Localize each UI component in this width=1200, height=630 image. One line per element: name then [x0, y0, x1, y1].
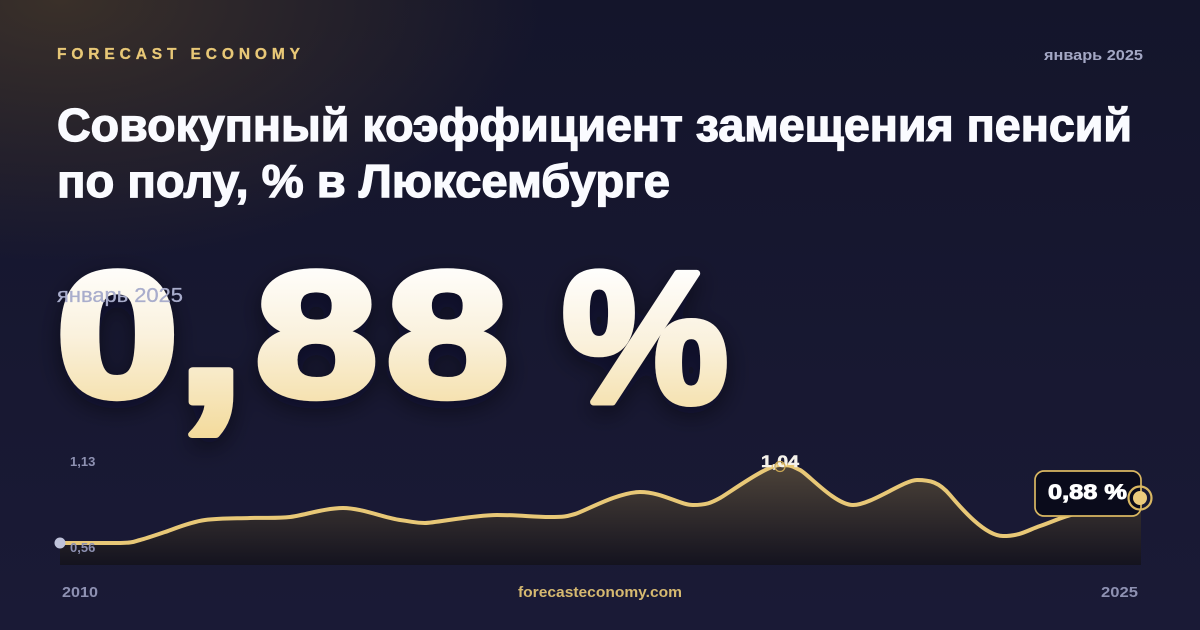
- date top right: январь 2025: [1044, 47, 1143, 64]
- line chart: [54, 452, 1152, 565]
- start point: [54, 538, 66, 548]
- big number: 0: [56, 235, 179, 434]
- website footer: forecasteconomy.com: [518, 585, 682, 601]
- x axis end year: 2025: [1101, 584, 1138, 601]
- axis max label: 1,13: [70, 454, 95, 469]
- title: по полу, % в Люксембурге: [57, 155, 670, 207]
- chart line: [60, 465, 1141, 543]
- chart area fill: [60, 465, 1141, 565]
- title: [57, 99, 1132, 207]
- peak marker: [775, 462, 785, 472]
- x axis start year: 2010: [62, 584, 98, 601]
- big number: 8: [386, 235, 509, 434]
- current value callout: 0,88 %: [1048, 481, 1127, 504]
- big number date label: январь 2025: [57, 285, 183, 307]
- big number: %: [562, 233, 728, 442]
- peak value label: 1,04: [761, 452, 800, 471]
- current point marker: [1128, 486, 1152, 510]
- axis min label: 0,56: [70, 540, 95, 555]
- title: Совокупный коэффициент замещения пенсий: [57, 99, 1132, 151]
- big number: 8: [255, 235, 378, 434]
- brand label: FORECAST ECONOMY: [57, 46, 301, 63]
- current value callout: [1035, 471, 1141, 516]
- big number: ,: [175, 212, 246, 447]
- big number: [56, 212, 728, 447]
